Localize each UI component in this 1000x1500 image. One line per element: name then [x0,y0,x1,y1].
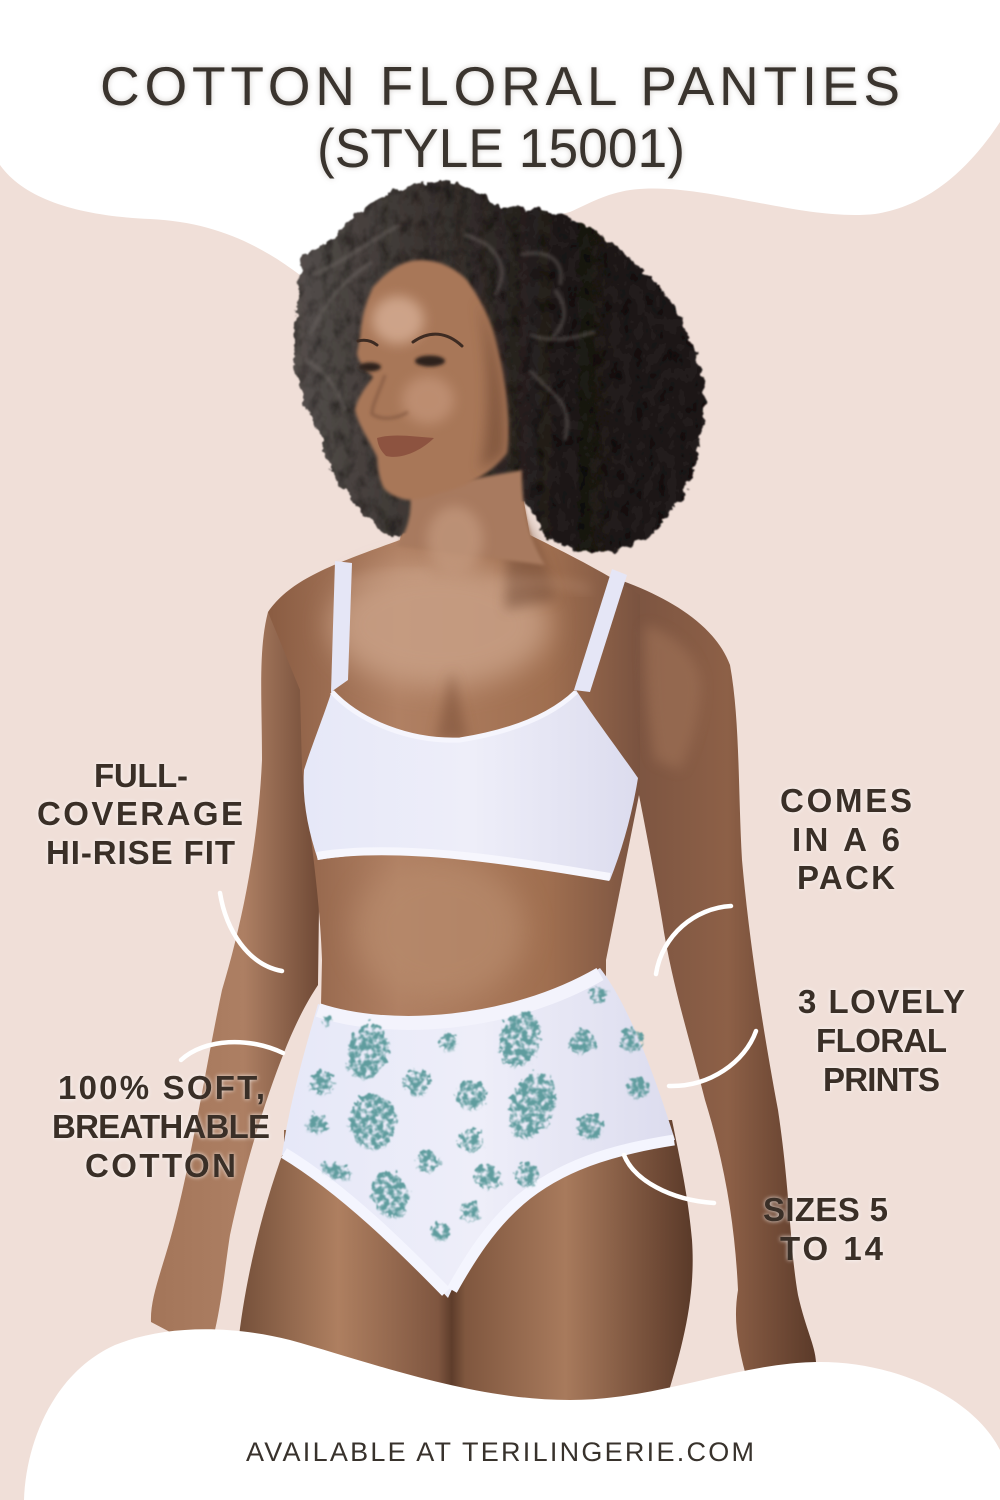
arrow curves [181,893,756,1203]
title: COTTON FLORAL PANTIES [100,55,900,117]
forehead highlight [372,296,424,344]
callout: 3 lovely floral prints [798,983,965,1098]
callout: full-coverage hi-rise fit: HI-RISE FIT [46,834,235,871]
panties [282,968,675,1298]
callout: full-coverage hi-rise fit: COVERAGE [37,795,243,832]
callout: sizes 5 to 14: TO 14 [780,1230,884,1267]
callout: 100% soft, breathable cotton [52,1069,270,1184]
right arm [620,580,816,1372]
callout: 100% soft, breathable cotton: COTTON [85,1147,236,1184]
cheek highlight [402,376,454,424]
neck [396,470,545,565]
shoulder shading [645,625,701,770]
eyes [359,356,445,372]
bra [304,690,638,880]
cleavage shadow [436,670,468,740]
white bottom wave panel [24,1329,1000,1500]
white top wave panel [0,0,1000,275]
callout: comes in a 6 pack [780,782,912,896]
neck shadow [505,500,555,610]
callout: 100% soft, breathable cotton: BREATHABLE [52,1108,270,1145]
waistband [318,974,600,1023]
bra neckline trim [332,692,576,740]
left arm [151,612,320,1332]
callout: 3 lovely floral prints: PRINTS [823,1061,940,1098]
neck highlight [427,506,483,574]
collarbone highlights [340,573,590,590]
bra hem [317,851,610,877]
belly shading [355,860,525,1000]
callout: full-coverage hi-rise fit [37,757,243,871]
title: (STYLE 15001) [317,117,685,179]
callout: comes in a 6 pack: PACK [797,859,895,896]
callout: comes in a 6 pack: COMES [780,782,912,819]
callout: 3 lovely floral prints: 3 LOVELY [798,983,965,1020]
eyebrows [358,334,462,346]
torso [268,480,640,1050]
bra straps [331,561,627,692]
footer text: AVAILABLE AT TERILINGERIE.COM [246,1437,754,1467]
callout: comes in a 6 pack: IN A 6 [792,821,900,858]
face [355,260,508,500]
callout: full-coverage hi-rise fit: FULL- [94,757,188,794]
callout: sizes 5 to 14 [763,1191,888,1267]
callout: 3 lovely floral prints: FLORAL [816,1022,947,1059]
leg trim [284,1140,674,1292]
callout: 100% soft, breathable cotton: 100% SOFT, [58,1069,265,1106]
thighs [238,1120,693,1420]
callout: sizes 5 to 14: SIZES 5 [763,1191,888,1228]
hair [293,181,705,553]
nose shadow [372,375,408,418]
floral print [307,986,649,1241]
hair highlights [305,225,595,440]
face side shadow [478,300,506,470]
title [100,55,900,179]
woman figure [151,181,816,1420]
chest highlight [330,563,550,687]
smile [377,436,434,457]
